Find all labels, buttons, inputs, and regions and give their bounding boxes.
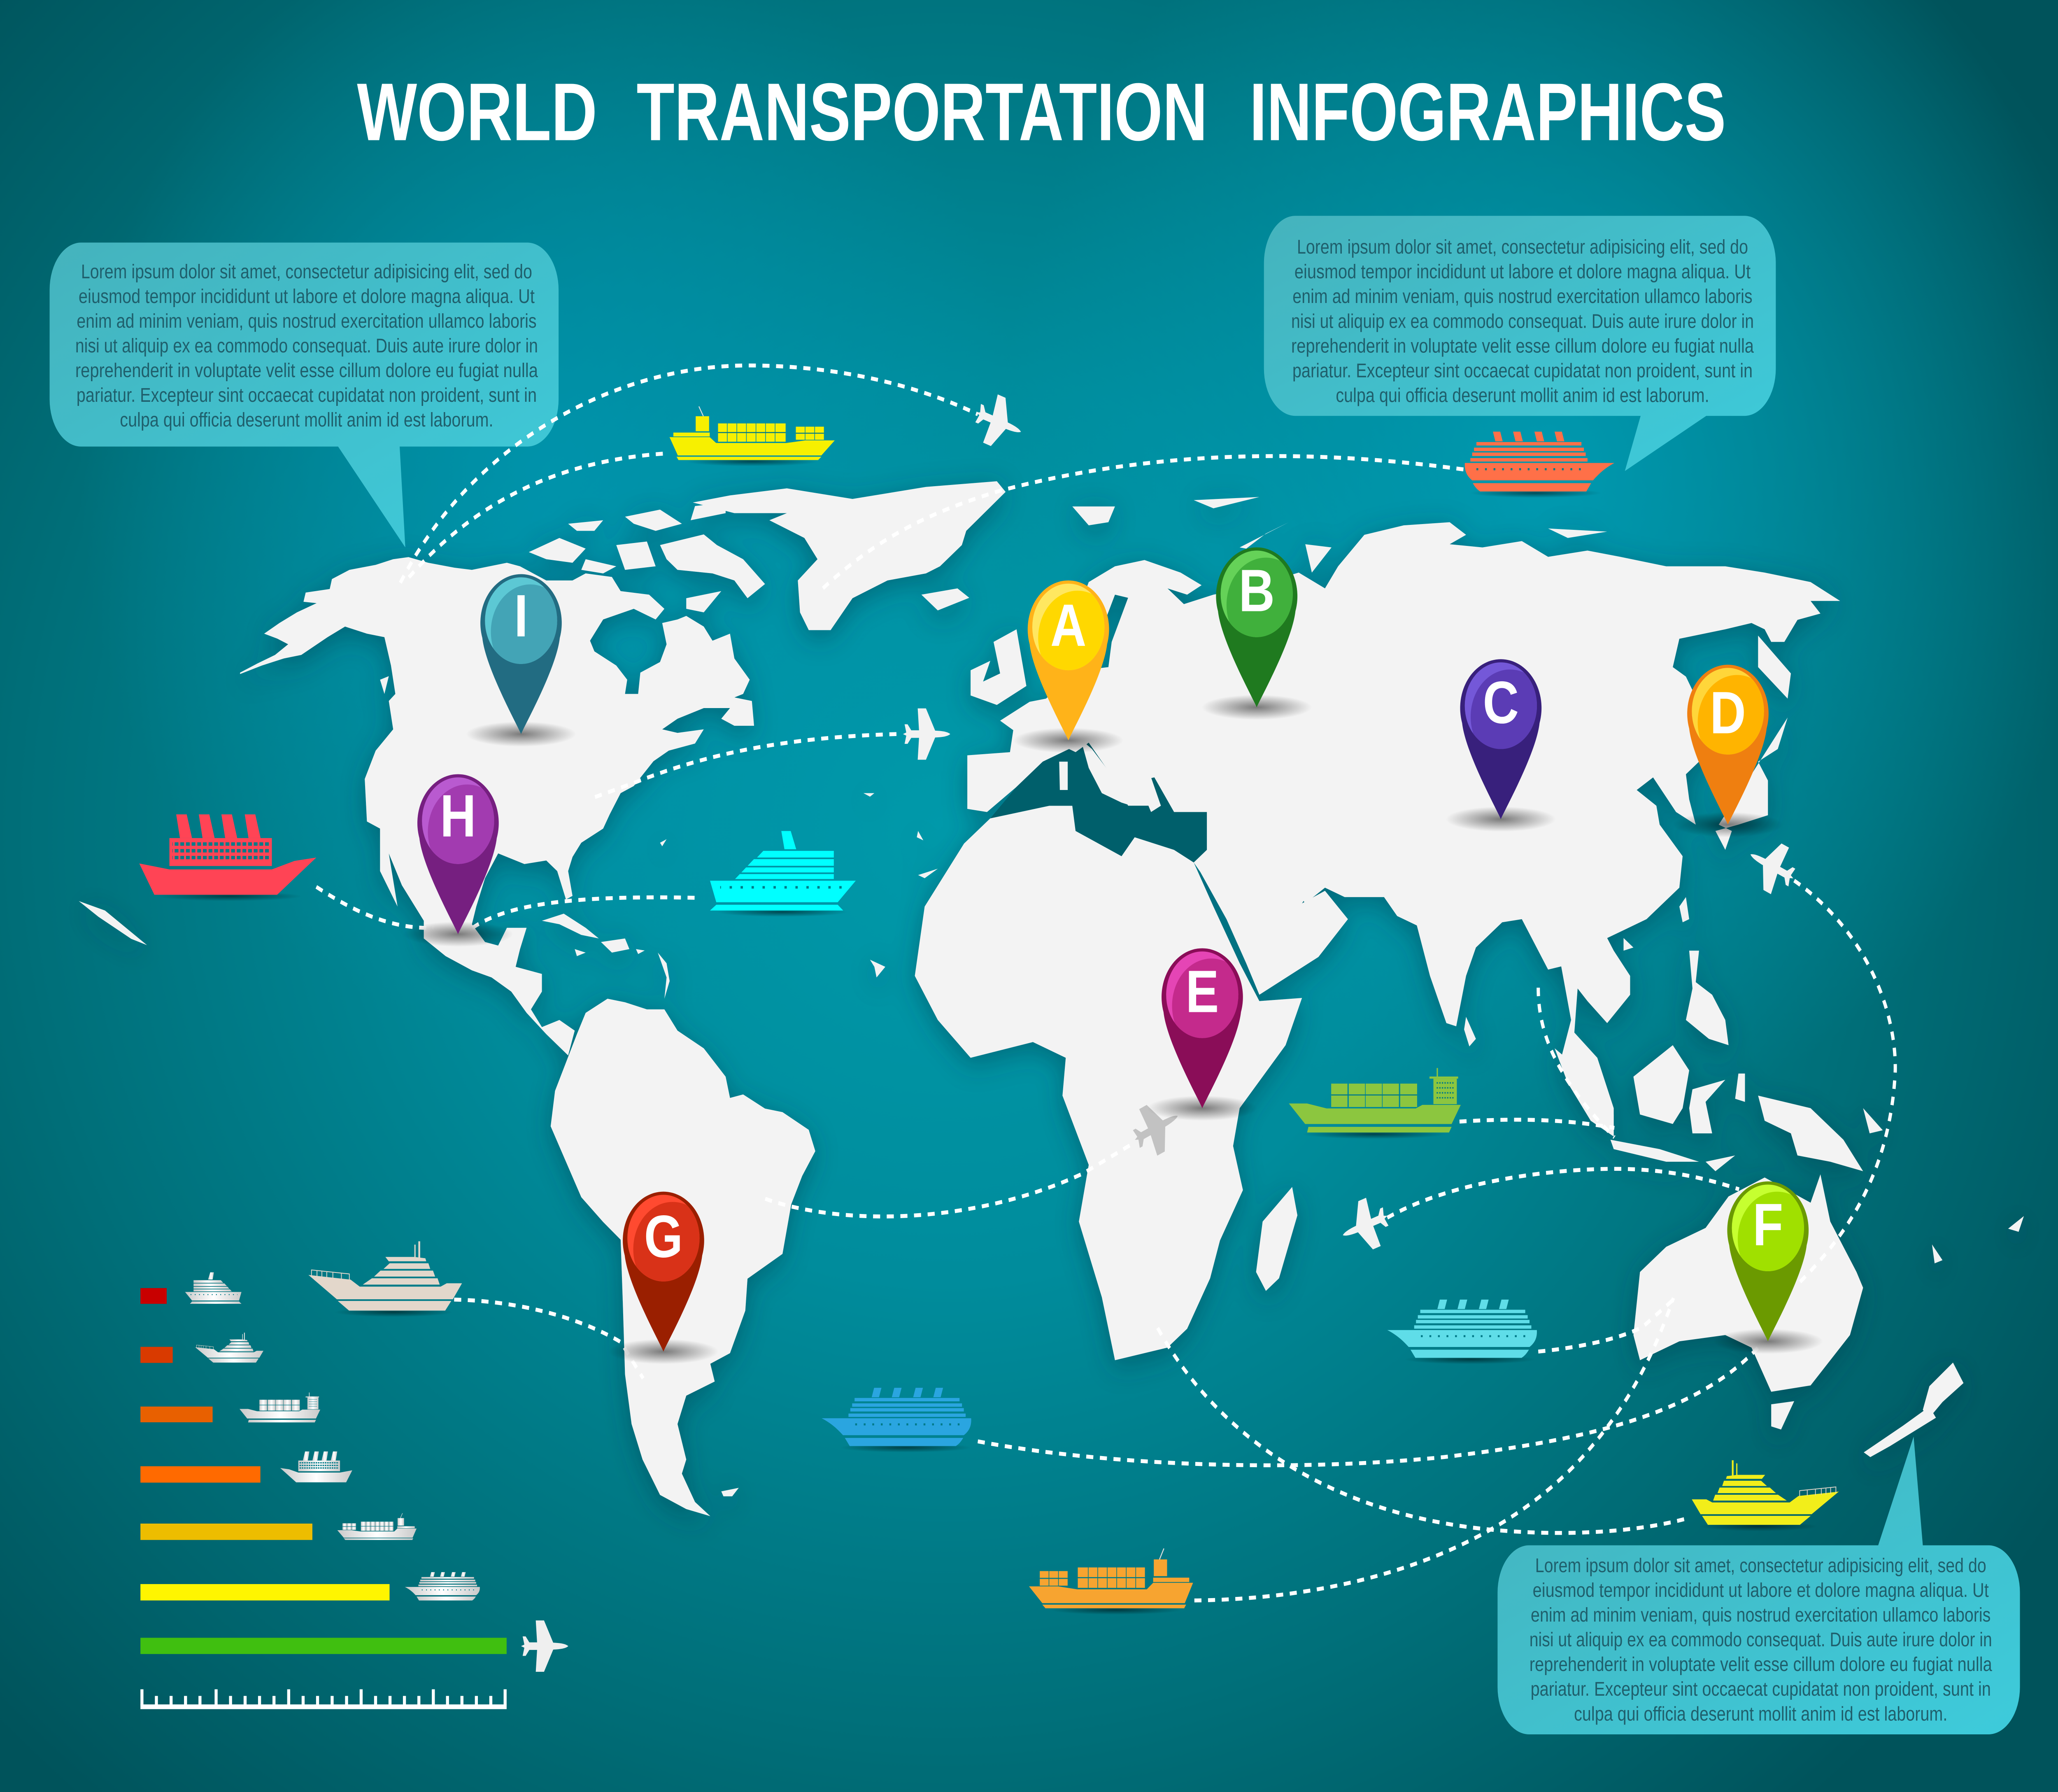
- pin I: I: [514, 583, 528, 649]
- plane: atlantic: [903, 708, 950, 760]
- Eurasia, Africa, Australia and islands: [915, 497, 1883, 1430]
- ship: green container: [1289, 1068, 1461, 1139]
- callout: top right: reprehenderit in voluptate velit esse cillum dolore eu fugiat nulla: [1291, 335, 1754, 357]
- pin B: B: [1239, 557, 1275, 624]
- ship: red funnel ship: [139, 814, 316, 901]
- plane: Indian Ocean: [1336, 1192, 1395, 1259]
- pin A: A: [1050, 592, 1086, 659]
- scale ruler: [140, 1689, 507, 1709]
- callout: bottom right: pariatur. Excepteur sint occaecat cupidatat non proident, sunt in: [1531, 1678, 1991, 1700]
- callout: bottom right: culpa qui officia deserunt mollit anim id est laborum.: [1574, 1703, 1947, 1725]
- callout: top left: culpa qui officia deserunt mollit anim id est laborum.: [120, 409, 494, 431]
- bar 5 with cargo ship: [140, 1513, 417, 1540]
- callout: top left: enim ad minim veniam, quis nostrud exercitation ullamco laboris: [77, 310, 537, 332]
- callout: top left: eiusmod tempor incididunt ut labore et dolore magna aliqua. Ut: [79, 285, 535, 308]
- world map: [79, 481, 2024, 1516]
- callout: top right: culpa qui officia deserunt mollit anim id est laborum.: [1336, 384, 1709, 406]
- callout: top right: enim ad minim veniam, quis nostrud exercitation ullamco laboris: [1292, 286, 1753, 308]
- bar 4 with funnel ship: [140, 1452, 352, 1482]
- callout: top left: [50, 242, 559, 548]
- pin D: [1673, 665, 1783, 837]
- pin G: [608, 1192, 719, 1364]
- pin E: [1147, 948, 1257, 1121]
- pin A: [1013, 580, 1124, 753]
- ship: pale blue liner: [1388, 1300, 1537, 1364]
- callout: top left: reprehenderit in voluptate velit esse cillum dolore eu fugiat nulla: [75, 360, 538, 382]
- callout: top right: eiusmod tempor incididunt ut labore et dolore magna aliqua. Ut: [1294, 261, 1751, 283]
- pin C: C: [1483, 669, 1519, 736]
- bar 3 with container ship: [140, 1393, 320, 1422]
- pin I: [466, 574, 576, 747]
- callout: top left: Lorem ipsum dolor sit amet, consectetur adipisicing elit, sed do: [81, 261, 532, 283]
- callout: top left: nisi ut aliquip ex ea commodo consequat. Duis aute irure dolor in: [75, 335, 538, 357]
- callout: bottom right: enim ad minim veniam, quis nostrud exercitation ullamco laboris: [1531, 1604, 1990, 1626]
- ship: coral liner: [1465, 431, 1614, 498]
- pin G: G: [644, 1203, 683, 1270]
- ship: yellow yacht: [1692, 1460, 1839, 1531]
- callout: top left: pariatur. Excepteur sint occaecat cupidatat non proident, sunt in: [77, 384, 537, 406]
- pin E: E: [1186, 958, 1219, 1025]
- flight and shipping routes: [316, 366, 1895, 1601]
- pin H: [403, 774, 513, 947]
- pin F: F: [1753, 1191, 1783, 1258]
- callout: top right: nisi ut aliquip ex ea commodo consequat. Duis aute irure dolor in: [1291, 310, 1754, 332]
- title: TRANSPORTATION: [637, 66, 1208, 158]
- title: WORLD: [357, 66, 597, 158]
- pin F: [1713, 1181, 1823, 1354]
- ship: beige yacht: [308, 1241, 462, 1317]
- pin D: D: [1710, 680, 1746, 746]
- bar 2 with yacht: [140, 1333, 263, 1363]
- bar chart with vehicle legend: [140, 1272, 568, 1709]
- callout: bottom right: Lorem ipsum dolor sit amet, consectetur adipisicing elit, sed do: [1535, 1554, 1986, 1577]
- pin B: [1201, 548, 1312, 720]
- Mediterranean sea shade: [990, 740, 1207, 862]
- bar 7 with plane: [140, 1620, 568, 1672]
- New Zealand and small islands: [79, 901, 2024, 1457]
- callout: top right: Lorem ipsum dolor sit amet, consectetur adipisicing elit, sed do: [1297, 236, 1748, 258]
- callout: bottom right: [1497, 1437, 2020, 1734]
- plane: top: [969, 388, 1028, 456]
- pin C: [1446, 659, 1556, 832]
- callout: bottom right: reprehenderit in voluptate velit esse cillum dolore eu fugiat nulla: [1530, 1654, 1992, 1675]
- bar 6 with ocean liner: [140, 1572, 480, 1601]
- callout: top right: pariatur. Excepteur sint occaecat cupidatat non proident, sunt in: [1292, 360, 1753, 382]
- ship: cyan liner: [710, 831, 856, 917]
- title: INFOGRAPHICS: [1250, 66, 1726, 158]
- plane: near Japan: [1741, 831, 1802, 902]
- Americas and Greenland: [240, 481, 1006, 1516]
- callout: top right: [1264, 216, 1776, 471]
- ship: blue liner: [822, 1388, 971, 1452]
- title: [357, 66, 1726, 158]
- callout: bottom right: eiusmod tempor incididunt ut labore et dolore magna aliqua. Ut: [1533, 1580, 1989, 1601]
- ship: orange cargo: [1029, 1548, 1193, 1615]
- ship: yellow cargo: [670, 406, 835, 466]
- pin H: H: [440, 783, 476, 849]
- callout: bottom right: nisi ut aliquip ex ea commodo consequat. Duis aute irure dolor in: [1530, 1629, 1992, 1651]
- plane: over Africa: [1126, 1093, 1187, 1163]
- bar 1 with liner: [140, 1272, 242, 1304]
